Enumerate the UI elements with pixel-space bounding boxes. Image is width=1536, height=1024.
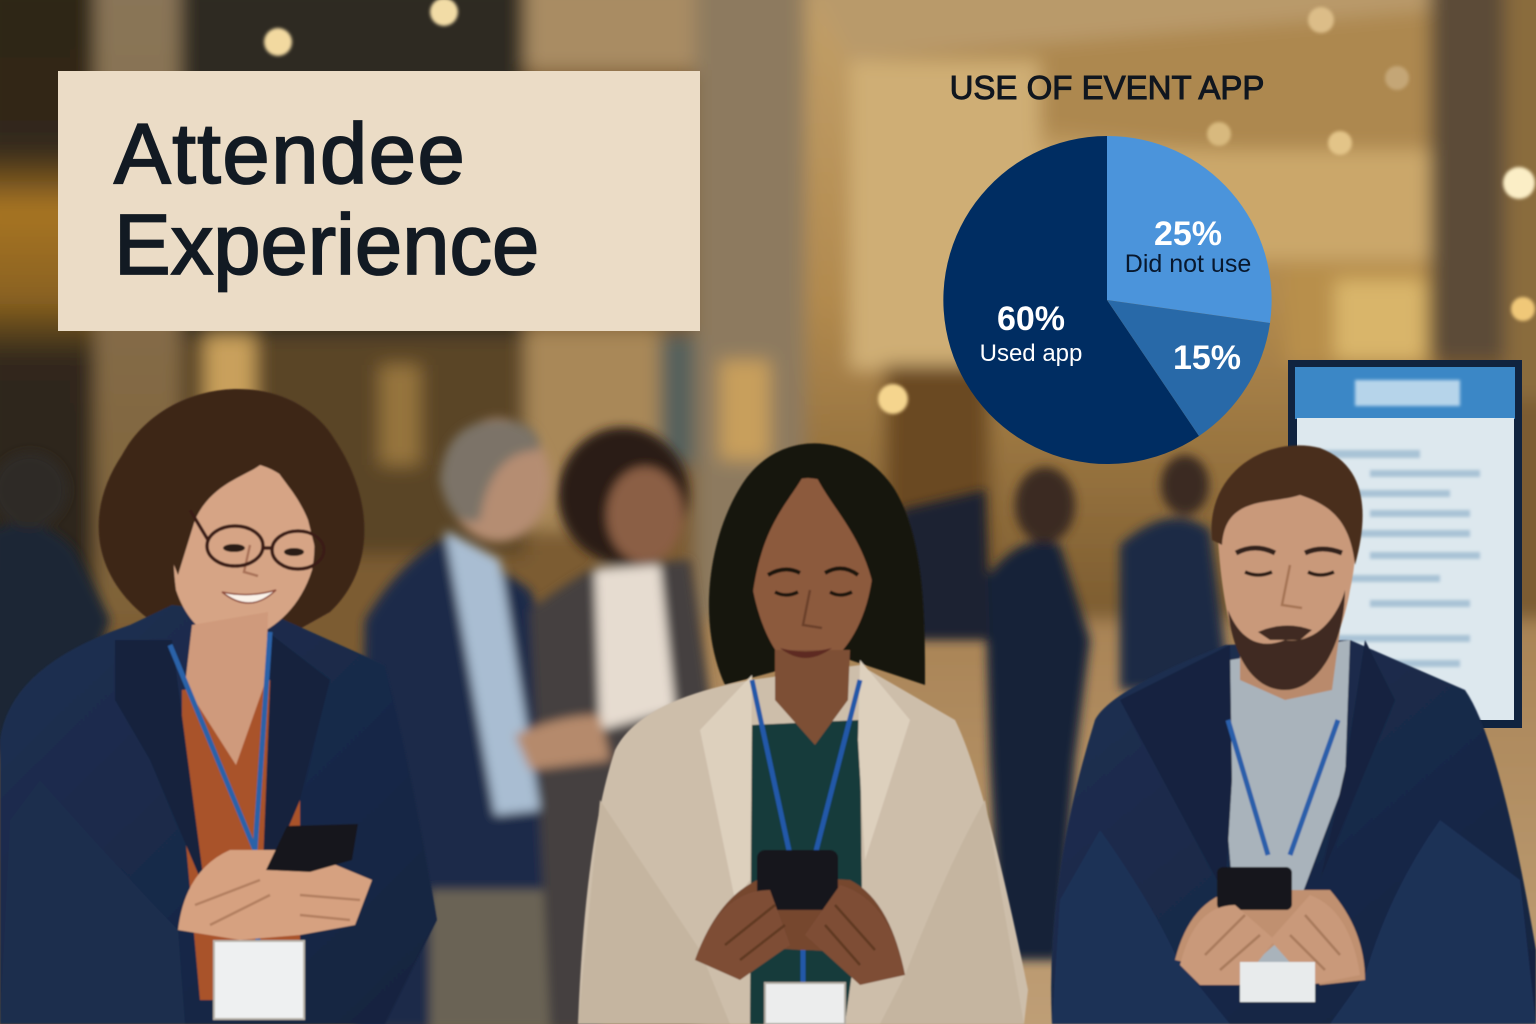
schedule display screen (1288, 360, 1522, 728)
pie labels: Used app (980, 340, 1082, 367)
ceiling and wall lights (264, 0, 1535, 414)
title card (58, 71, 700, 331)
pie labels: 60% (997, 300, 1065, 338)
blurred background attendees (0, 418, 1230, 1024)
slice: 15% (1107, 300, 1270, 436)
pie chart: use of event app (943, 136, 1272, 464)
pie labels (980, 215, 1251, 377)
attendee: bearded man, right (1051, 445, 1536, 1024)
pie labels: 25% (1154, 215, 1222, 253)
pie labels: 15% (1173, 339, 1241, 377)
heading: Attendee Experience: Attendee (114, 107, 466, 202)
slice: did not use 25% (1107, 136, 1272, 323)
pie chart title: USE OF EVENT APP (950, 69, 1264, 106)
heading: Attendee Experience: Experience (114, 198, 539, 293)
heading: Attendee Experience (112, 107, 539, 293)
attendee: woman in beige blazer, centre (578, 443, 1028, 1024)
attendee: woman with glasses, left (0, 389, 437, 1024)
slice: used app 60% (943, 136, 1199, 464)
pie labels: Did not use (1125, 250, 1251, 278)
